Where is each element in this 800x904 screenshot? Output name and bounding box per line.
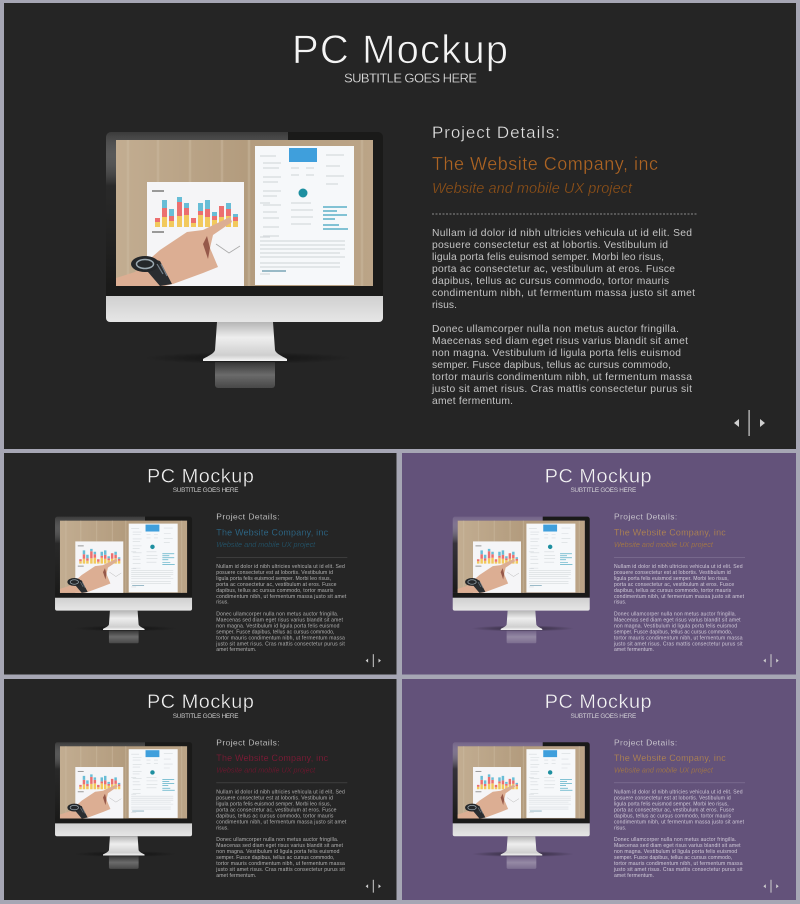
title: PC Mockup [147, 466, 254, 488]
body text: non magna. Vestibulum id ligula porta felis euismod [432, 348, 681, 359]
body text [431, 228, 695, 407]
slide background [402, 453, 796, 674]
body text: dapibus, tellus ac cursus commodo, tortor mauris [614, 588, 732, 594]
body text: porta ac consectetur ac, vestibulum at eros. Fusce [614, 808, 734, 814]
body text: posuere consectetur est at lobortis. Vestibulum id [432, 240, 668, 251]
body text: porta ac consectetur ac, vestibulum at eros. Fusce [216, 808, 337, 814]
body text: ligula porta felis euismod semper. Morbi leo risus, [216, 576, 331, 582]
body text: dapibus, tellus ac cursus commodo, tortor mauris [614, 813, 732, 819]
subtitle: SUBTITLE GOES HERE [173, 487, 239, 494]
body text: ligula porta felis euismod semper. Morbi leo risus, [216, 802, 331, 808]
body text: dapibus, tellus ac cursus commodo, tortor mauris [432, 276, 669, 287]
heading: project details: Project Details: [216, 737, 280, 747]
body text: Maecenas sed diam eget risus varius blandit sit amet [216, 618, 343, 624]
icon: desktop monitor [106, 132, 383, 388]
body text: risus. [432, 300, 457, 311]
icon: desktop monitor [453, 742, 590, 869]
body text: non magna. Vestibulum id ligula porta felis euismod [614, 623, 737, 629]
body text: semper. Fusce dapibus, tellus ac cursus commodo, [432, 360, 671, 371]
icon: desktop monitor [453, 517, 590, 643]
body text: dapibus, tellus ac cursus commodo, tortor mauris [216, 813, 334, 819]
slide content [453, 466, 779, 667]
slide background [4, 3, 796, 449]
slide content [55, 691, 381, 893]
body text: amet fermentum. [614, 873, 654, 879]
project subtitle: Website and mobile UX project [216, 766, 316, 774]
body text: tortor mauris condimentum nibh, ut fermentum massa [216, 861, 345, 867]
slide content [453, 691, 779, 893]
title: PC Mockup [147, 691, 254, 713]
company name: The Website Company, inc [432, 154, 658, 174]
body text: condimentum nibh, ut fermentum massa justo sit amet [614, 594, 745, 600]
body text: posuere consectetur est at lobortis. Vestibulum id [216, 796, 333, 802]
body text: condimentum nibh, ut fermentum massa justo sit amet [432, 288, 695, 299]
slide background [402, 679, 796, 900]
slide: small purple orange, bottom [402, 679, 796, 900]
title: PC Mockup [545, 691, 652, 713]
body text: tortor mauris condimentum nibh, ut fermentum massa [614, 861, 743, 867]
icon: desktop monitor [55, 742, 192, 869]
body text: condimentum nibh, ut fermentum massa justo sit amet [614, 819, 745, 825]
subtitle: SUBTITLE GOES HERE [344, 70, 477, 86]
body text: semper. Fusce dapibus, tellus ac cursus commodo, [216, 855, 334, 861]
body text: justo sit amet risus. Cras mattis consectetur purus sit [613, 641, 743, 647]
body text: Donec ullamcorper nulla non metus auctor fringilla. [432, 324, 679, 335]
heading: project details: Project Details: [216, 512, 280, 522]
body text: semper. Fusce dapibus, tellus ac cursus commodo, [216, 629, 334, 635]
body text: porta ac consectetur ac, vestibulum at eros. Fusce [614, 582, 734, 588]
body text: dapibus, tellus ac cursus commodo, tortor mauris [216, 588, 334, 594]
project subtitle: Website and mobile UX project [432, 181, 633, 197]
body text: Nullam id dolor id nibh ultricies vehicula ut id elit. Sed [216, 564, 345, 570]
body text: Maecenas sed diam eget risus varius blandit sit amet [216, 843, 343, 849]
subtitle: SUBTITLE GOES HERE [570, 713, 636, 720]
slide: small purple orange, top [402, 453, 796, 674]
heading: project details: Project Details: [614, 737, 677, 747]
company name: The Website Company, inc [614, 753, 726, 763]
slide background [4, 679, 396, 900]
body text: non magna. Vestibulum id ligula porta felis euismod [216, 623, 340, 629]
body text: risus. [216, 600, 229, 606]
body text: semper. Fusce dapibus, tellus ac cursus commodo, [614, 629, 732, 635]
body text [215, 790, 347, 879]
body text: posuere consectetur est at lobortis. Vestibulum id [216, 570, 333, 576]
project subtitle: Website and mobile UX project [216, 541, 316, 549]
title: PC Mockup [292, 28, 508, 72]
body text [613, 790, 745, 879]
body text: Donec ullamcorper nulla non metus auctor fringilla. [614, 837, 736, 843]
body text: tortor mauris condimentum nibh, ut fermentum massa [216, 635, 345, 641]
body text: risus. [614, 600, 626, 606]
slide background [4, 453, 396, 674]
icon: desktop monitor [55, 517, 192, 643]
heading: project details: Project Details: [432, 123, 560, 142]
slide: small dark blue [4, 453, 396, 674]
body text: risus. [614, 825, 626, 831]
body text: Donec ullamcorper nulla non metus auctor fringilla. [614, 612, 736, 618]
body text: amet fermentum. [216, 873, 256, 879]
company name: The Website Company, inc [216, 527, 329, 537]
body text: Maecenas sed diam eget risus varius blandit sit amet [614, 843, 741, 849]
body text: Nullam id dolor id nibh ultricies vehicula ut id elit. Sed [216, 790, 345, 796]
body text: condimentum nibh, ut fermentum massa justo sit amet [216, 594, 347, 600]
slide content [55, 466, 381, 667]
body text: condimentum nibh, ut fermentum massa justo sit amet [216, 819, 347, 825]
slide: large dark orange [4, 3, 796, 449]
body text: semper. Fusce dapibus, tellus ac cursus commodo, [614, 855, 732, 861]
body text: Donec ullamcorper nulla non metus auctor fringilla. [216, 837, 338, 843]
body text [215, 564, 347, 653]
navigation arrows [763, 654, 779, 667]
body text: justo sit amet risus. Cras mattis consectetur purus sit [215, 641, 345, 647]
body text: tortor mauris condimentum nibh, ut fermentum massa [614, 635, 743, 641]
body text: porta ac consectetur ac, vestibulum at eros. Fusce [432, 264, 675, 275]
title: PC Mockup [545, 466, 652, 488]
slide: small dark red [4, 679, 396, 900]
body text: Nullam id dolor id nibh ultricies vehicula ut id elit. Sed [614, 790, 743, 796]
company name: The Website Company, inc [614, 527, 726, 537]
subtitle: SUBTITLE GOES HERE [173, 713, 239, 720]
navigation arrows [734, 410, 765, 436]
navigation arrows [763, 880, 779, 893]
body text: risus. [216, 825, 229, 831]
body text: ligula porta felis euismod semper. Morbi leo risus, [614, 576, 729, 582]
body text: posuere consectetur est at lobortis. Vestibulum id [614, 796, 731, 802]
body text: amet fermentum. [216, 647, 256, 653]
body text: posuere consectetur est at lobortis. Vestibulum id [614, 570, 731, 576]
body text: Maecenas sed diam eget risus varius blandit sit amet [432, 336, 688, 347]
body text: tortor mauris condimentum nibh, ut fermentum massa [432, 372, 692, 383]
company name: The Website Company, inc [216, 753, 329, 763]
project subtitle: Website and mobile UX project [614, 541, 714, 549]
body text: Nullam id dolor id nibh ultricies vehicula ut id elit. Sed [614, 564, 743, 570]
body text: amet fermentum. [614, 647, 654, 653]
body text: Donec ullamcorper nulla non metus auctor fringilla. [216, 612, 338, 618]
project subtitle: Website and mobile UX project [614, 766, 714, 774]
navigation arrows [366, 654, 381, 667]
body text: justo sit amet risus. Cras mattis consectetur purus sit [215, 867, 345, 873]
body text: Maecenas sed diam eget risus varius blandit sit amet [614, 618, 741, 624]
body text: justo sit amet risus. Cras mattis consectetur purus sit [613, 867, 743, 873]
body text: amet fermentum. [432, 396, 513, 407]
body text: ligula porta felis euismod semper. Morbi leo risus, [432, 252, 664, 263]
body text: non magna. Vestibulum id ligula porta felis euismod [216, 849, 340, 855]
body text: Nullam id dolor id nibh ultricies vehicula ut id elit. Sed [432, 228, 692, 239]
body text [613, 564, 745, 653]
heading: project details: Project Details: [614, 512, 677, 522]
body text: non magna. Vestibulum id ligula porta felis euismod [614, 849, 737, 855]
body text: porta ac consectetur ac, vestibulum at eros. Fusce [216, 582, 337, 588]
navigation arrows [366, 880, 381, 893]
body text: justo sit amet risus. Cras mattis consectetur purus sit [431, 384, 692, 395]
subtitle: SUBTITLE GOES HERE [570, 487, 636, 494]
body text: ligula porta felis euismod semper. Morbi leo risus, [614, 802, 729, 808]
